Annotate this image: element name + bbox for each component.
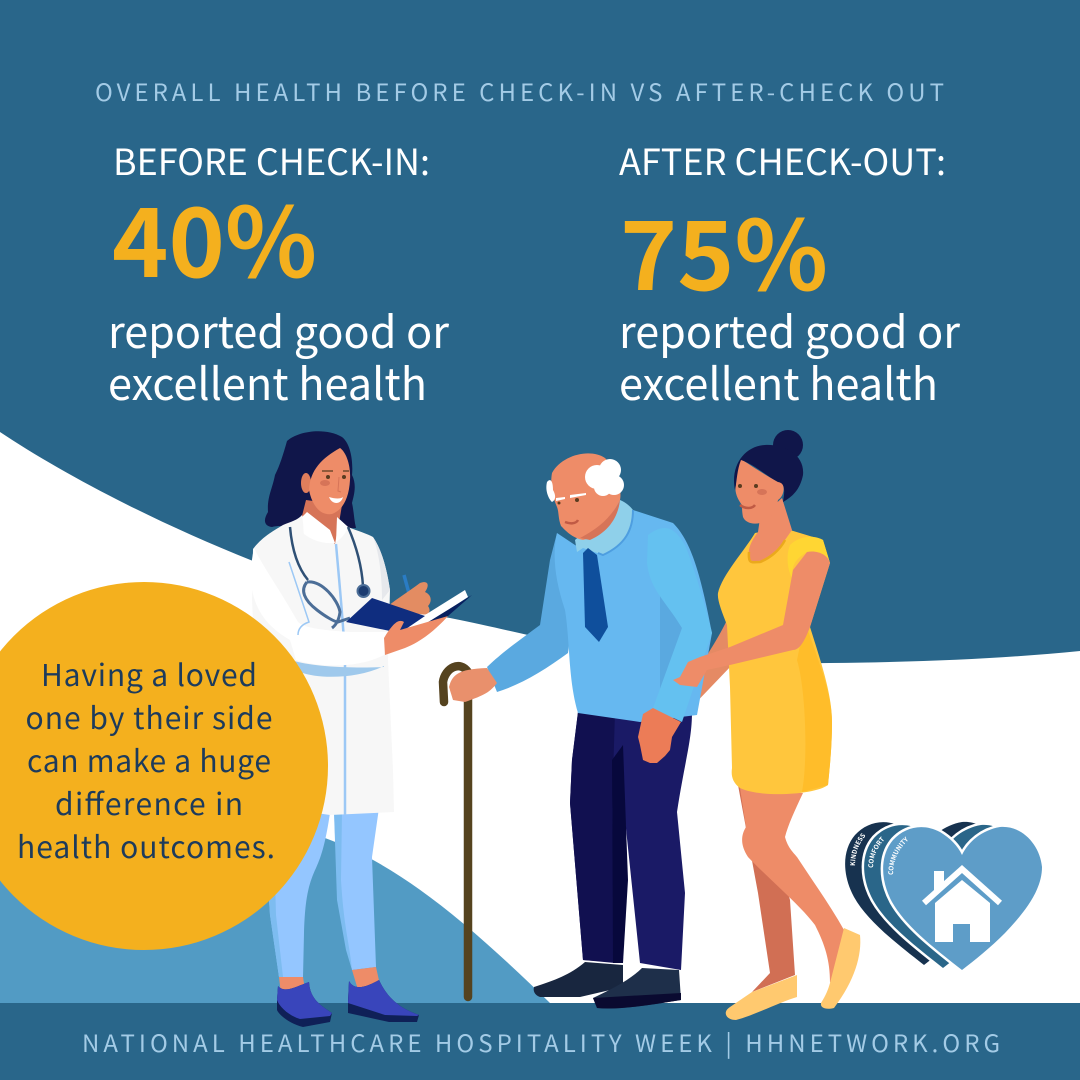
house — [924, 869, 1000, 942]
heart layer: comfort — [864, 825, 1023, 968]
dress — [718, 530, 832, 794]
cane hand — [449, 668, 497, 702]
shoes — [534, 962, 681, 1008]
heart layer: kindness — [845, 822, 1004, 965]
back arm — [687, 620, 732, 712]
right sleeve — [647, 528, 712, 722]
stat: 75%: 75% — [620, 179, 828, 318]
trousers — [570, 712, 692, 970]
title: OVERALL HEALTH BEFORE CHECK-IN VS AFTER-CHECK OUT — [95, 73, 944, 108]
woman's front arm — [673, 552, 830, 687]
front leg — [740, 788, 844, 983]
text: reported good or excellent health: excellent health — [108, 349, 427, 413]
neck and face — [301, 448, 350, 544]
coat sleeve — [251, 548, 388, 665]
collar — [575, 500, 633, 555]
sweater body — [555, 510, 712, 722]
arc labels: KINDNESS — [850, 833, 865, 866]
neck and head — [734, 430, 803, 562]
hair — [265, 431, 356, 530]
panel: before check-in — [108, 134, 450, 413]
callout text: Having a loved — [41, 651, 257, 695]
text: reported good or excellent health — [619, 297, 961, 413]
callout text: one by their side — [26, 694, 272, 738]
light blue hill — [0, 825, 550, 1003]
heading: before check-in: BEFORE CHECK-IN: — [113, 134, 430, 186]
illustration: older man — [443, 453, 712, 1008]
stat: 40%: 40% — [112, 166, 317, 305]
notebook — [346, 590, 472, 633]
back leg — [738, 785, 795, 992]
callout text — [17, 651, 275, 867]
hanging hand — [638, 708, 681, 763]
illustration: woman — [687, 430, 860, 1020]
text: reported good or excellent health — [108, 297, 450, 413]
footer text: NATIONAL HEALTHCARE HOSPITALITY WEEK | HHNETWORK.ORG — [82, 1024, 1000, 1059]
writing hand — [388, 582, 431, 618]
callout text: can make a huge — [27, 737, 271, 781]
heart main — [883, 827, 1042, 970]
text: reported good or excellent health: reported good or — [619, 297, 961, 361]
stethoscope — [290, 527, 370, 628]
arc labels — [850, 833, 908, 874]
left arm sleeve — [487, 533, 575, 692]
footer band — [0, 1003, 1080, 1080]
coat centre seam — [336, 544, 345, 815]
tie — [583, 548, 608, 642]
white wave background — [0, 432, 1080, 1010]
doctor shoes — [277, 980, 419, 1027]
callout text: health outcomes. — [17, 823, 275, 867]
arc labels: COMMUNITY — [888, 836, 908, 874]
logo: heart house — [845, 822, 1042, 970]
coat — [252, 515, 394, 815]
doctor legs — [262, 800, 380, 994]
shoes — [726, 928, 860, 1020]
illustration: doctor — [251, 431, 472, 1027]
head — [551, 453, 620, 540]
panel: after check-out — [619, 134, 961, 413]
holding hand — [384, 616, 448, 655]
text: reported good or excellent health: reported good or — [108, 297, 450, 361]
heading: after check-out: AFTER CHECK-OUT: — [619, 134, 946, 186]
text: reported good or excellent health: excellent health — [619, 349, 938, 413]
hair — [546, 459, 624, 502]
callout circle — [0, 582, 328, 950]
cane — [443, 666, 468, 997]
pen — [404, 575, 413, 608]
callout text: difference in — [55, 780, 243, 824]
arc labels: COMFORT — [868, 836, 884, 868]
